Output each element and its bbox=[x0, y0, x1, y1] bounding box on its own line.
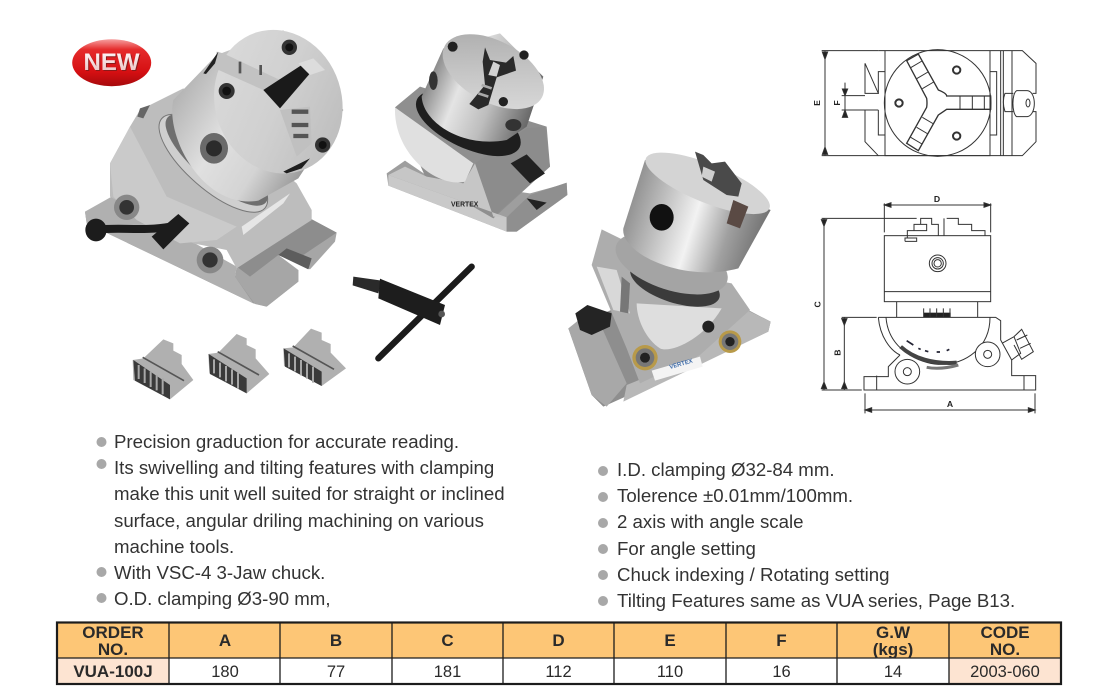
table data row: 180 bbox=[211, 663, 239, 681]
dimension F bbox=[832, 83, 865, 117]
table data row: 16 bbox=[772, 663, 791, 681]
feature list: left column: machine tools. bbox=[114, 536, 234, 557]
specification table bbox=[57, 622, 1061, 684]
table header: G.W bbox=[876, 623, 911, 642]
jaw 1 bbox=[133, 339, 193, 399]
dimension B bbox=[832, 317, 877, 390]
table data row bbox=[73, 662, 1040, 681]
table data row: 77 bbox=[327, 663, 345, 681]
chuck flange bbox=[145, 99, 282, 228]
feature list: right column: 2 axis with angle scale bbox=[617, 511, 804, 532]
dimension D: D bbox=[934, 194, 940, 204]
table data row: 110 bbox=[657, 663, 683, 681]
feature list: left column: Its swivelling and tilting features with clamping bbox=[114, 457, 494, 478]
dimension F: F bbox=[832, 100, 842, 106]
feature list: right column: For angle setting bbox=[617, 538, 756, 559]
dimension C bbox=[812, 218, 917, 390]
chuck key bbox=[353, 267, 472, 358]
feature list: left column: Precision graduction for accurate reading. bbox=[114, 431, 459, 452]
table data row: 112 bbox=[545, 663, 572, 681]
table header: NO. bbox=[98, 640, 128, 659]
table header: B bbox=[330, 631, 342, 650]
dimension D bbox=[884, 194, 991, 232]
dimension E bbox=[812, 51, 878, 156]
table data row: VUA-100J bbox=[73, 662, 153, 681]
feature list: left column bbox=[96, 431, 505, 609]
table header: (kgs) bbox=[873, 640, 913, 659]
product photo: chuck unit, front view bbox=[568, 140, 777, 407]
table data row: 14 bbox=[884, 663, 902, 681]
table header: CODE bbox=[980, 623, 1030, 642]
new badge: NEW bbox=[84, 50, 141, 77]
new badge bbox=[72, 39, 151, 86]
feature list: left column: With VSC-4 3-Jaw chuck. bbox=[114, 562, 325, 583]
dimension A: A bbox=[947, 399, 954, 409]
bolts and handle bbox=[114, 195, 139, 220]
table header: NO. bbox=[990, 640, 1020, 659]
technical drawing: top view bbox=[812, 50, 1036, 156]
dimension A bbox=[865, 393, 1035, 413]
feature list: right column: I.D. clamping Ø32-84 mm. bbox=[617, 459, 835, 480]
product photo: chuck unit, scale side bbox=[387, 19, 567, 232]
table data row: 181 bbox=[434, 663, 461, 681]
jaw 2 bbox=[208, 334, 269, 393]
dimension B: B bbox=[832, 350, 842, 356]
brand label: VERTEX bbox=[669, 359, 694, 371]
feature list: right column: Chuck indexing / Rotating setting bbox=[617, 564, 890, 585]
brand mark: VERTEX bbox=[451, 200, 478, 209]
table header: A bbox=[219, 631, 231, 650]
feature list: right column: Tilting Features same as VUA series, Page B13. bbox=[617, 590, 1015, 611]
product photo: large tilted chuck unit bbox=[85, 13, 361, 307]
jaws bbox=[215, 52, 280, 90]
table header bbox=[82, 623, 1030, 659]
dimension E: E bbox=[812, 100, 822, 106]
jaw 3 bbox=[283, 329, 346, 386]
feature list: right column bbox=[598, 459, 1015, 611]
dimension C: C bbox=[812, 300, 822, 307]
spare jaw set bbox=[133, 329, 346, 399]
table header: ORDER bbox=[82, 623, 144, 642]
feature list: left column: make this unit well suited for straight or inclined bbox=[114, 483, 505, 504]
table data row: 2003-060 bbox=[970, 663, 1040, 681]
table header: C bbox=[441, 631, 454, 650]
technical drawing: side view bbox=[812, 194, 1036, 413]
table header: D bbox=[552, 631, 565, 650]
feature list: right column: Tolerence ±0.01mm/100mm. bbox=[617, 485, 853, 506]
feature list: left column: surface, angular driling machining on various bbox=[114, 510, 484, 531]
table header: E bbox=[664, 631, 676, 650]
table header: F bbox=[776, 631, 787, 650]
feature list: left column: O.D. clamping Ø3-90 mm, bbox=[114, 588, 330, 609]
new badge: NEW bbox=[84, 49, 140, 76]
